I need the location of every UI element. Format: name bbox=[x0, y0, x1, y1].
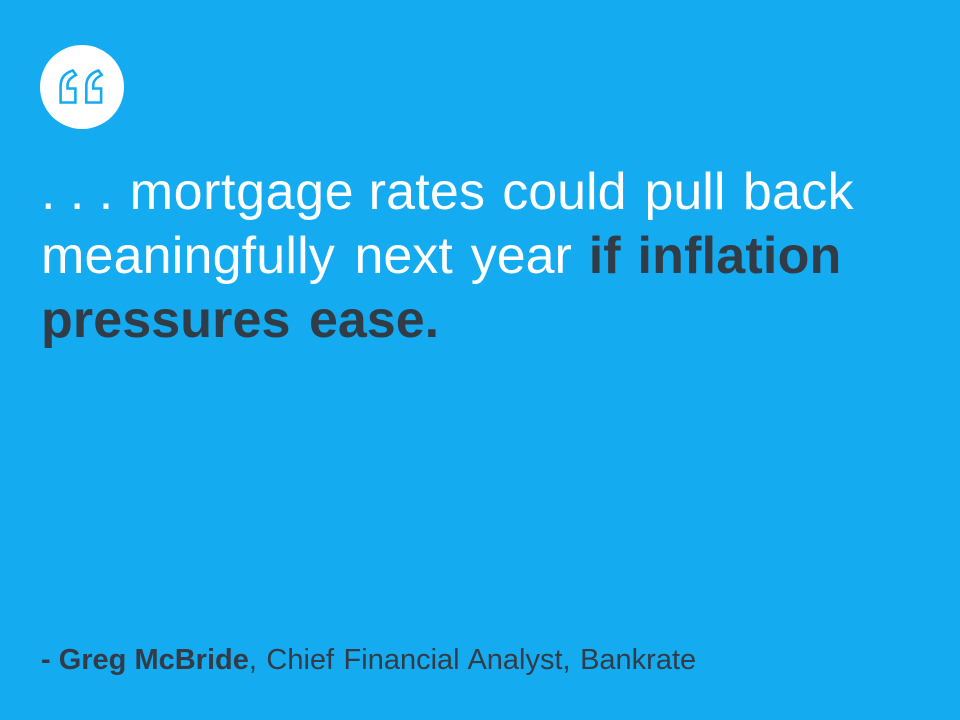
quote text: pressures ease. bbox=[41, 291, 439, 349]
quote text bbox=[41, 163, 854, 349]
quote text: . . . mortgage rates could pull back bbox=[41, 163, 854, 221]
attribution: - Greg McBride, Chief Financial Analyst, Bankrate bbox=[41, 644, 696, 676]
icon: quotation mark badge bbox=[40, 45, 124, 129]
quote text: meaningfully next year if inflation bbox=[41, 227, 842, 285]
